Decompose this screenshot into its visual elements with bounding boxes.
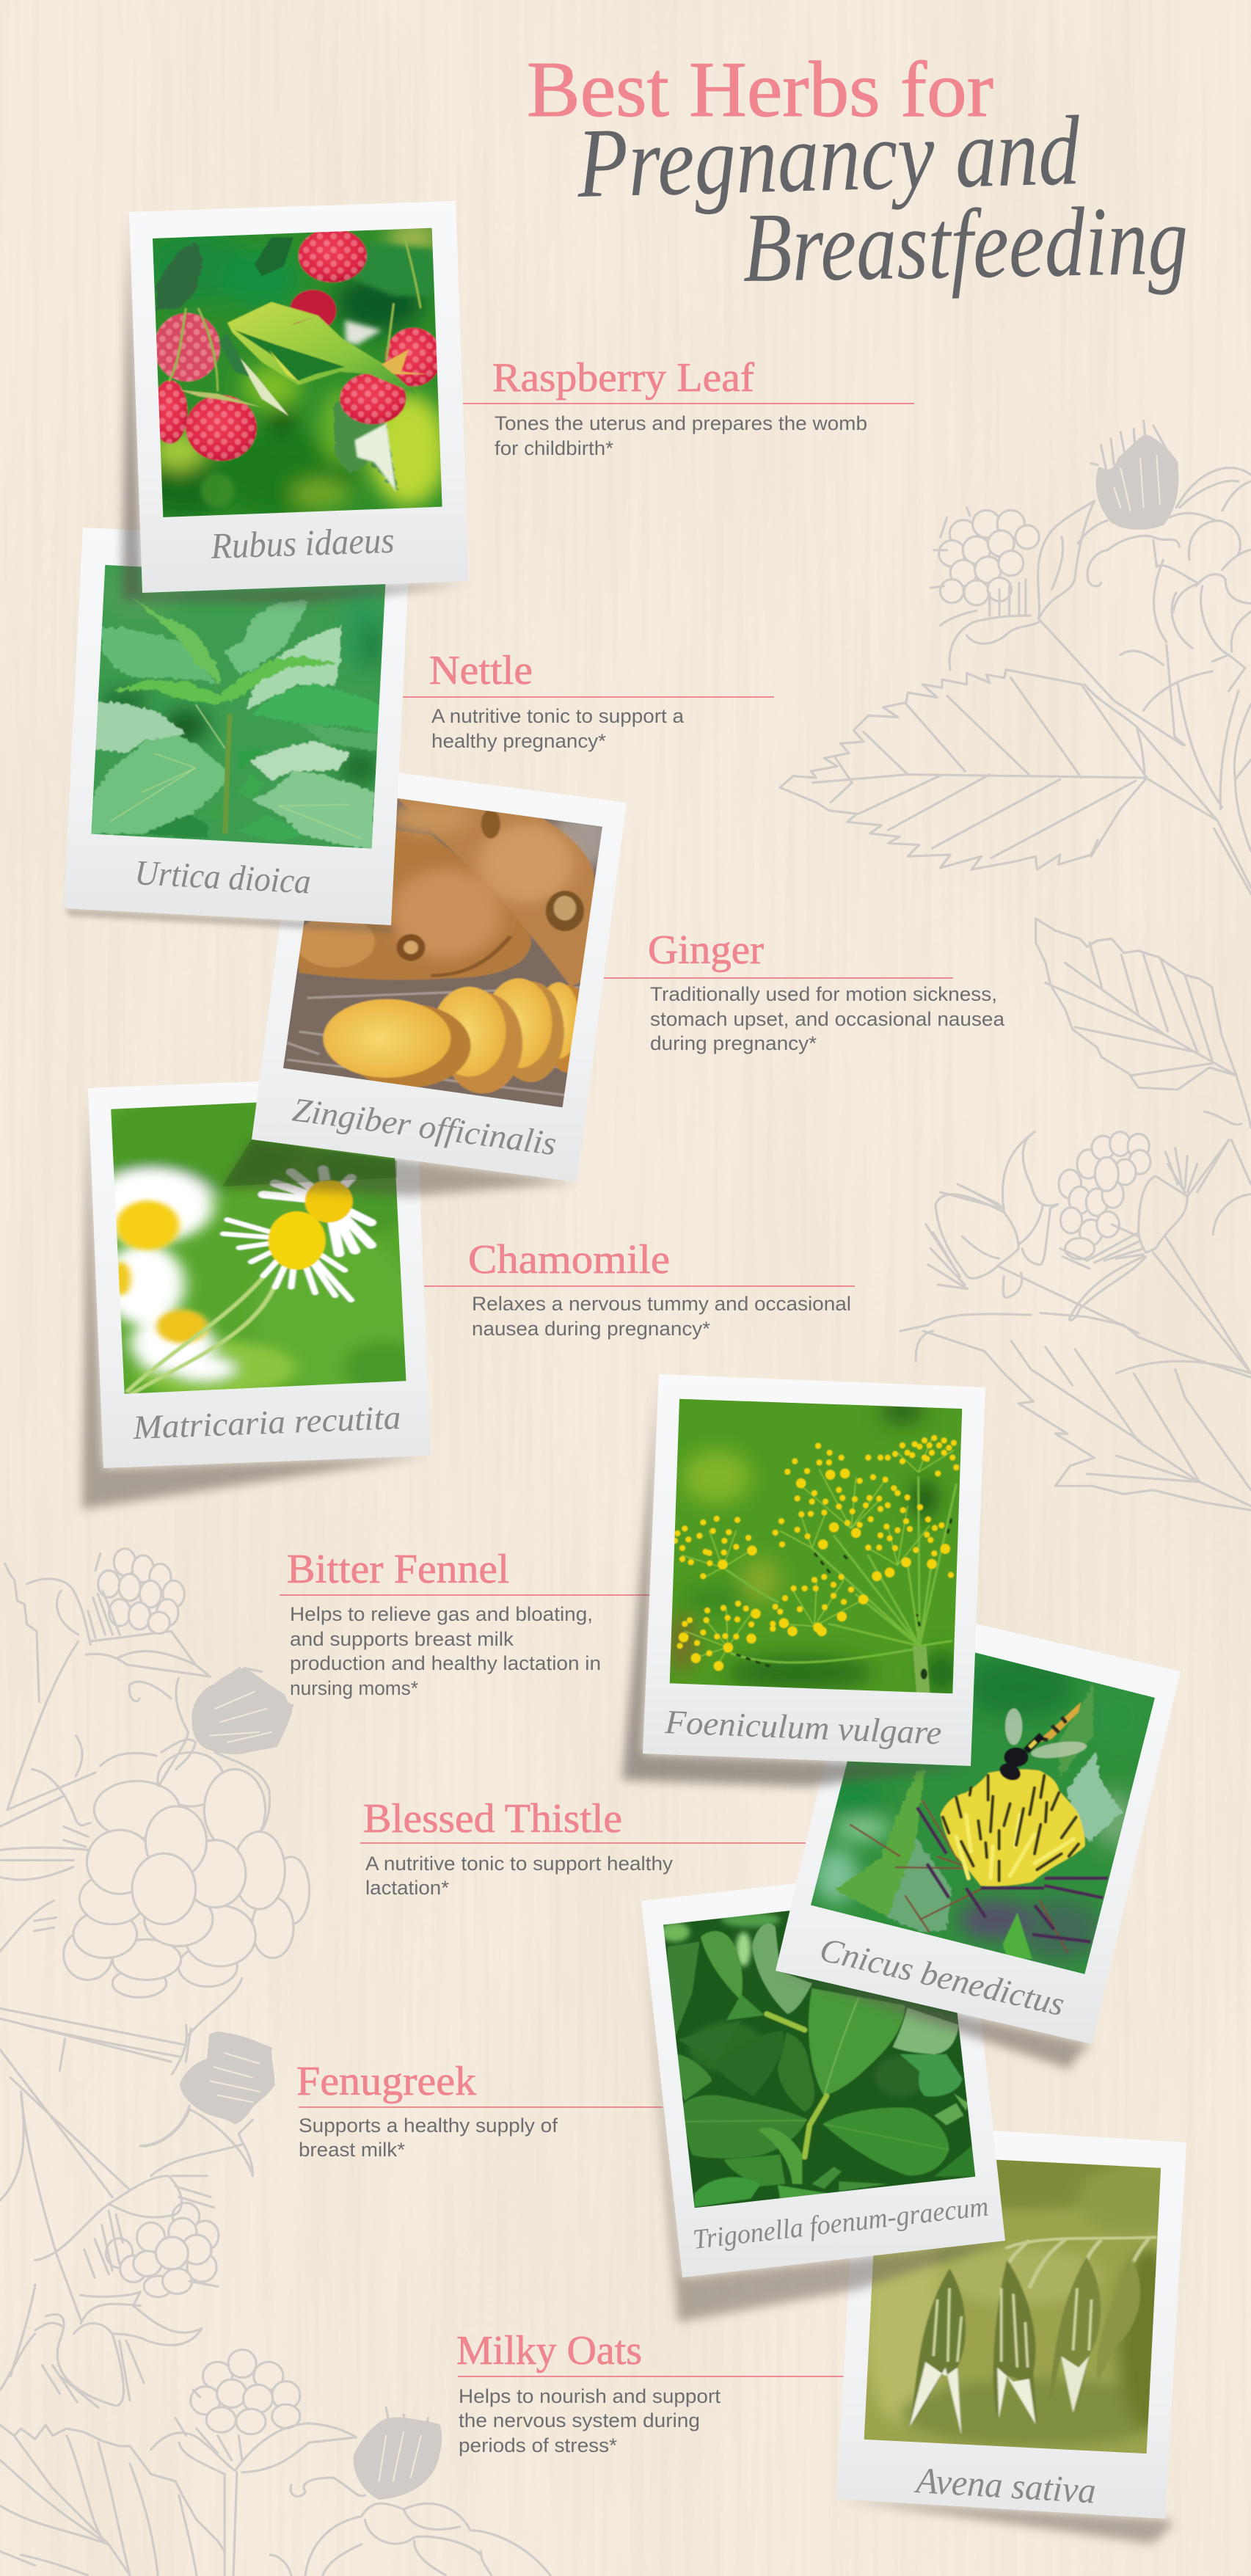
text block: Ginger [604, 927, 1005, 1054]
text block: Chamomile: nausea during pregnancy* [472, 1318, 711, 1340]
text block: Chamomile: Chamomile [468, 1237, 670, 1282]
photo card: Bitter Fennel [622, 1374, 985, 1787]
text block: Bitter Fennel: Helps to relieve gas and bloating, [290, 1603, 593, 1625]
text block: Bitter Fennel: nursing moms* [290, 1677, 418, 1699]
title [527, 46, 1189, 303]
text block: Blessed Thistle: lactation* [365, 1877, 449, 1899]
botanical sketch: right middle leaf and berry [900, 919, 1251, 1510]
text block: Milky Oats: periods of stress* [459, 2434, 618, 2456]
photo: chamomile flowers [111, 1102, 406, 1394]
photo: fennel umbels [665, 1394, 969, 1697]
text block: Fenugreek: Supports a healthy supply of [299, 2115, 558, 2137]
text block: Ginger: stomach upset, and occasional nausea [650, 1008, 1005, 1030]
photo: fenugreek leaves [658, 1891, 981, 2214]
text block: Blessed Thistle: Blessed Thistle [363, 1796, 622, 1842]
text block: Blessed Thistle: A nutritive tonic to support healthy [365, 1853, 674, 1875]
text block: Chamomile: Relaxes a nervous tummy and occasional [472, 1293, 851, 1315]
text block: Nettle: A nutritive tonic to support a [431, 705, 685, 727]
text block: Raspberry Leaf [463, 355, 914, 459]
text block: Nettle: healthy pregnancy* [431, 730, 606, 752]
photo card: Chamomile [82, 1076, 431, 1509]
photo card: Blessed Thistle [776, 1598, 1181, 2069]
title line: Best Herbs for: Best Herbs for [527, 46, 993, 134]
text block: Chamomile [424, 1237, 855, 1340]
photo: oat spikelets [864, 2160, 1161, 2453]
photo card: Raspberry Leaf [122, 201, 469, 603]
text block: Nettle [403, 648, 774, 752]
text block: Bitter Fennel: Bitter Fennel [287, 1547, 509, 1592]
caption: Cnicus benedictus: Cnicus benedictus [817, 1930, 1068, 2023]
title line: Pregnancy and: Pregnancy and [575, 96, 1082, 219]
text block: Milky Oats: Milky Oats [456, 2328, 642, 2374]
text block: Ginger: Traditionally used for motion sickness, [650, 983, 997, 1005]
botanical sketch: left large raspberry [0, 1549, 310, 2062]
text block: Fenugreek [296, 2059, 663, 2161]
text block: Blessed Thistle [360, 1796, 806, 1899]
text block: Bitter Fennel: production and healthy lactation in [290, 1652, 601, 1674]
photo: raspberries [137, 222, 448, 521]
text block: Nettle: Nettle [429, 648, 533, 693]
text block: Milky Oats: the nervous system during [459, 2409, 700, 2431]
photo card: Milky Oats [836, 2123, 1189, 2544]
text block: Bitter Fennel [280, 1547, 650, 1699]
text block: Fenugreek: breast milk* [299, 2139, 405, 2161]
photo card: Ginger [222, 760, 627, 1196]
photo card: Fenugreek [641, 1864, 1005, 2322]
text block: Bitter Fennel: and supports breast milk [290, 1628, 514, 1650]
text block: Raspberry Leaf: for childbirth* [495, 437, 613, 459]
photo card: Nettle [64, 528, 410, 933]
caption: Rubus idaeus: Rubus idaeus [210, 519, 395, 566]
text block: Fenugreek: Fenugreek [296, 2059, 476, 2104]
botanical sketch: lower left flowers and leaf [0, 2025, 550, 2575]
caption: Avena sativa: Avena sativa [913, 2459, 1097, 2511]
photo: nettle leaves [88, 563, 389, 851]
caption: Zingiber officinalis: Zingiber officinalis [291, 1090, 558, 1162]
caption: Urtica dioica: Urtica dioica [134, 853, 312, 902]
caption: Trigonella foenum-graecum: Trigonella foenum-graecum [691, 2191, 990, 2255]
caption: Matricaria recutita: Matricaria recutita [131, 1398, 401, 1446]
text block: Ginger: Ginger [648, 927, 764, 973]
text block: Raspberry Leaf: Tones the uterus and prepares the womb [495, 412, 867, 434]
caption: Foeniculum vulgare: Foeniculum vulgare [664, 1703, 942, 1751]
text block: Raspberry Leaf: Raspberry Leaf [492, 355, 754, 401]
photo: ginger roots and slices [283, 798, 602, 1108]
text block: Milky Oats [456, 2328, 844, 2456]
botanical sketch: top right raspberry branch [780, 420, 1251, 894]
text block: Ginger: during pregnancy* [650, 1032, 817, 1054]
text block: Milky Oats: Helps to nourish and support [459, 2385, 721, 2407]
photo: thistle flower with hoverfly [807, 1627, 1159, 1979]
